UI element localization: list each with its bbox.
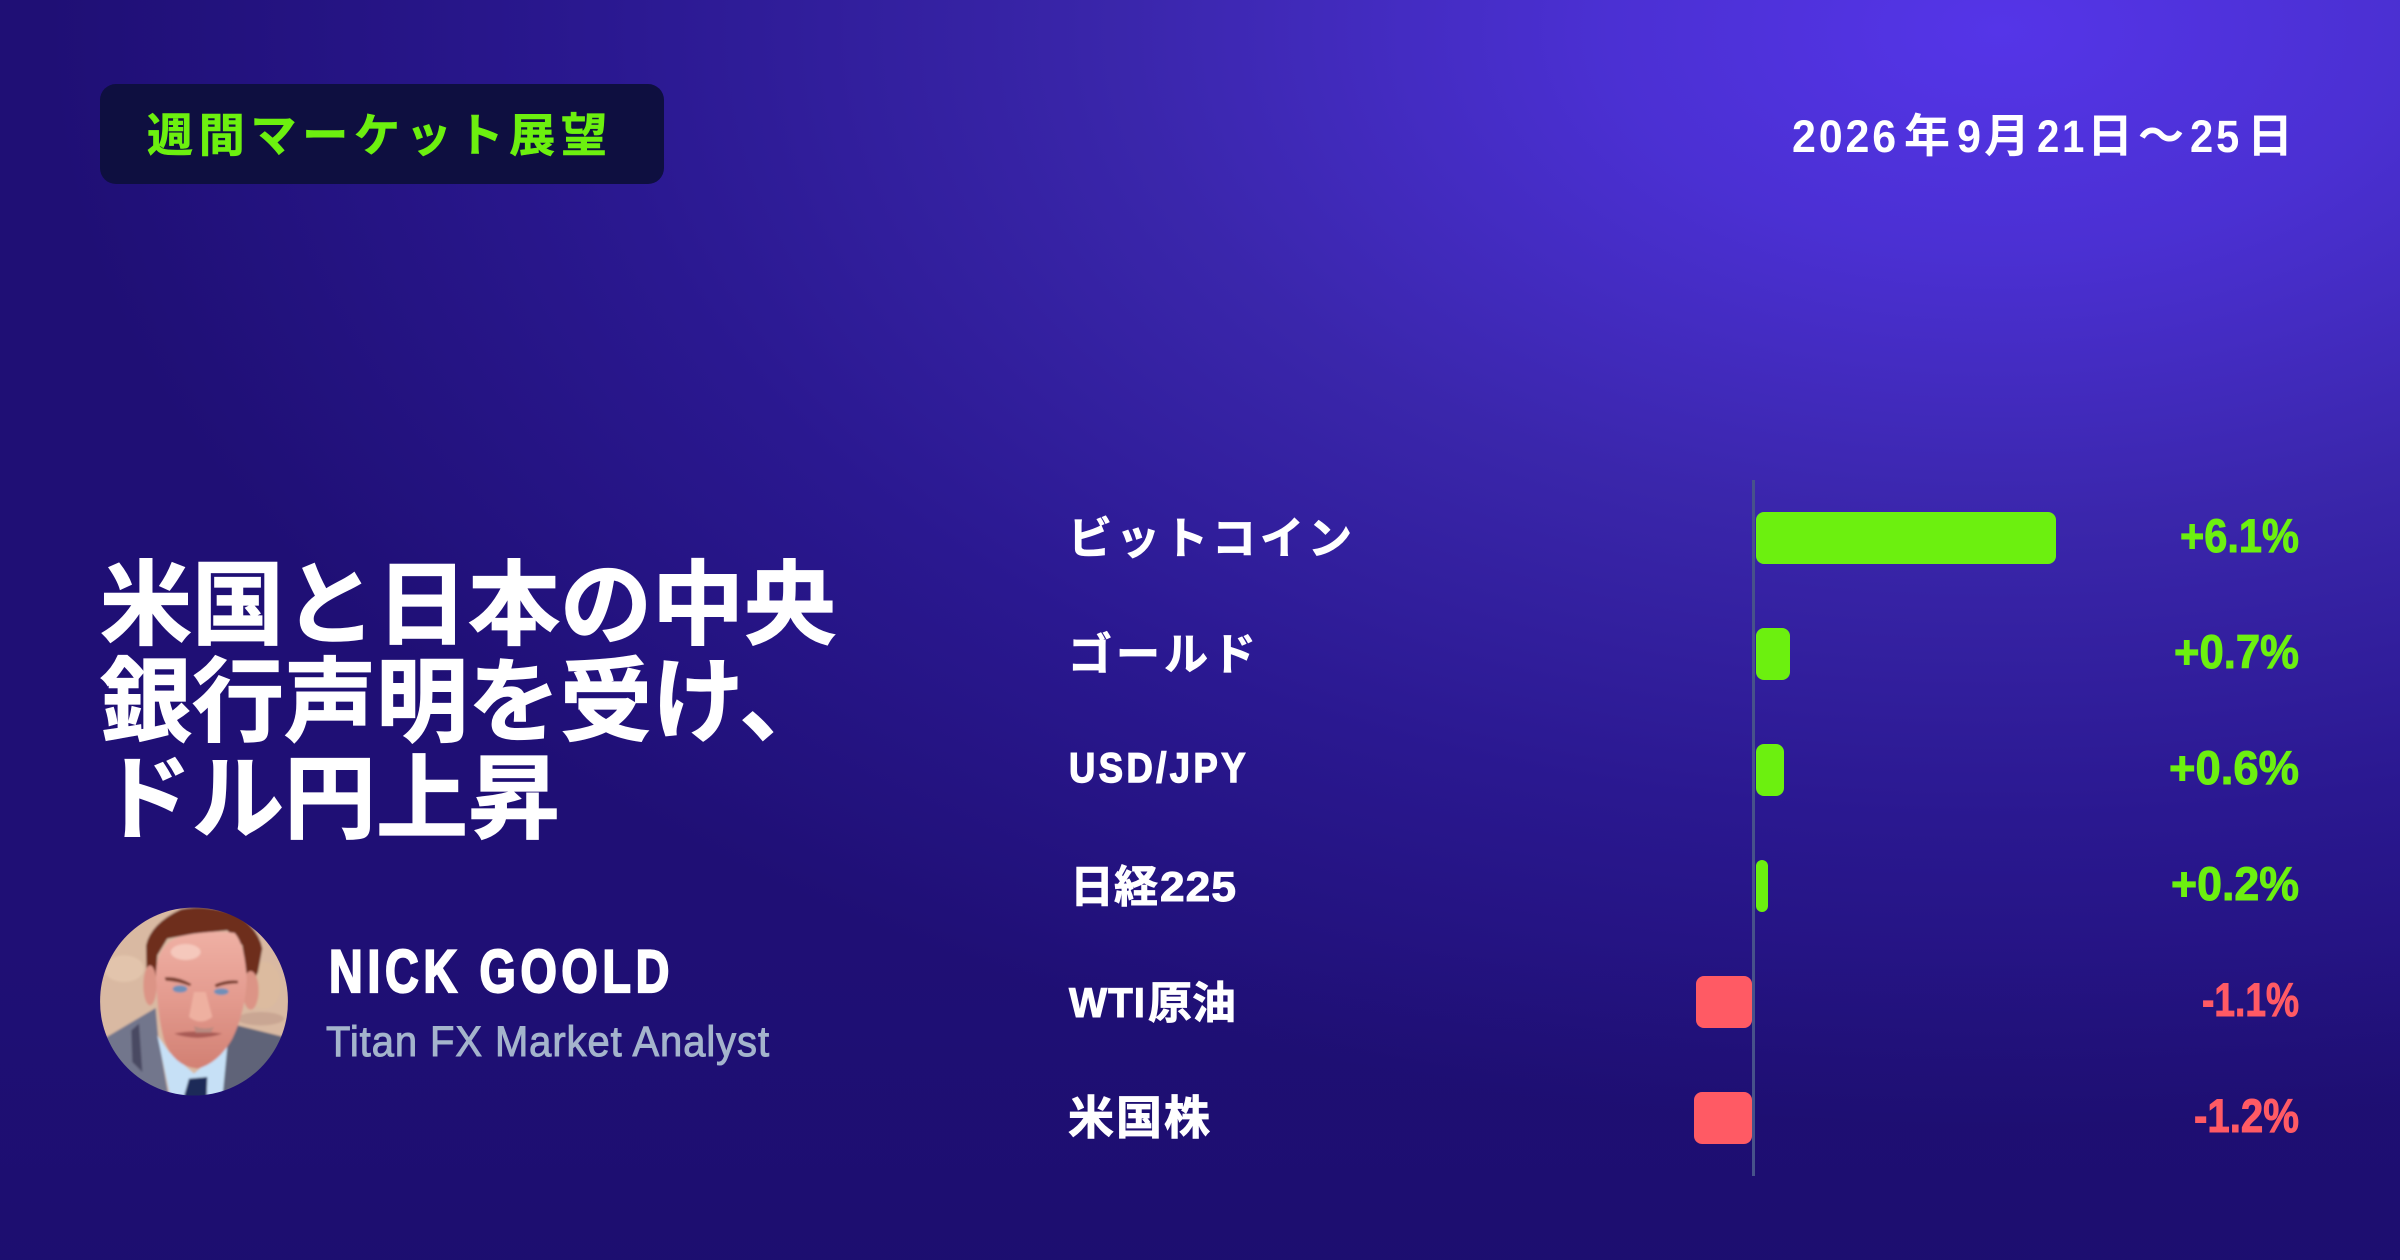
date range: 25	[2190, 111, 2242, 162]
badge: weekly market outlook: 週間マーケット展望	[147, 110, 607, 162]
icon: analyst portrait	[99, 907, 289, 1099]
date range: 年	[1904, 110, 1950, 162]
date range: 9	[1957, 111, 1981, 162]
date range: 21	[2037, 111, 2087, 162]
row: USD/JPY: +0.6%	[2169, 741, 2299, 794]
row: Bitcoin	[1068, 509, 2299, 564]
title	[100, 555, 836, 851]
row: US stocks: 米国株	[1068, 1092, 1210, 1144]
row: Nikkei 225	[1070, 857, 2299, 912]
badge: weekly market outlook	[100, 84, 664, 184]
date range: 〜	[2138, 110, 2184, 162]
row: US stocks	[1068, 1089, 2299, 1144]
date range: 2026	[1792, 111, 1899, 162]
analyst name: NICK GOOLD	[329, 938, 674, 1005]
row: Nikkei 225: +0.2%	[2171, 857, 2299, 910]
date range: 日	[2247, 110, 2293, 162]
title: ドル円上昇	[100, 749, 560, 851]
row: US stocks: -1.2%	[2194, 1089, 2299, 1142]
row: Bitcoin: +6.1%	[2180, 509, 2299, 562]
analyst role: Titan FX Market Analyst	[326, 1018, 770, 1066]
date range: 月	[1984, 110, 2030, 162]
title: 米国と日本の中央	[100, 555, 836, 657]
title: 銀行声明を受け、	[100, 652, 831, 754]
bar chart: weekly performance	[1068, 480, 2299, 1176]
row: WTI crude	[1069, 973, 2299, 1028]
row: Gold	[1068, 625, 2299, 680]
date range: 日	[2087, 110, 2133, 162]
axis line	[1752, 480, 1755, 1176]
row: WTI crude: 原油	[1148, 979, 1236, 1028]
row: Nikkei 225: 225	[1160, 863, 1237, 910]
row: Gold: +0.7%	[2174, 625, 2299, 678]
row: Gold: ゴールド	[1068, 630, 1256, 680]
row: Bitcoin: ビットコイン	[1068, 514, 1352, 564]
author: Nick Goold	[99, 907, 770, 1099]
row: USD/JPY	[1069, 741, 2299, 796]
row: WTI crude: -1.1%	[2202, 973, 2299, 1026]
row: USD/JPY: USD/JPY	[1069, 744, 1249, 791]
row: WTI crude: WTI	[1069, 979, 1146, 1026]
date range	[1792, 110, 2293, 162]
row: Nikkei 225: 日経	[1070, 863, 1158, 912]
